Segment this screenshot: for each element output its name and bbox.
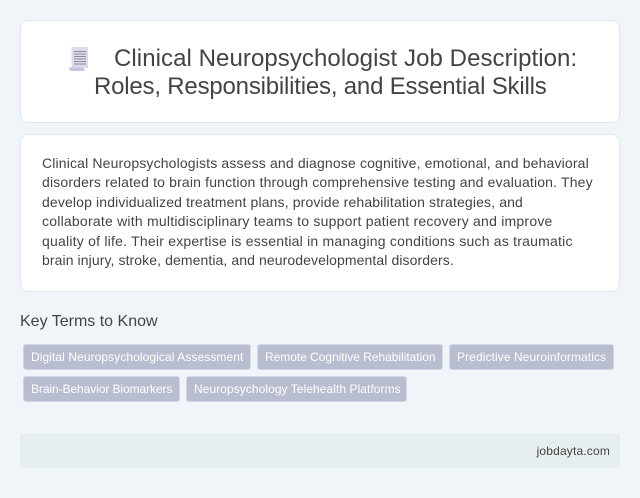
description text: disorders related to brain function through comprehensive testing and evaluation. They — [42, 174, 593, 190]
heading: key terms: Key Terms to Know — [20, 313, 158, 330]
description text: brain injury, stroke, dementia, and neurodevelopmental disorders. — [42, 252, 454, 268]
tag: biomarkers — [23, 376, 180, 402]
description text: develop individualized treatment plans, provide rehabilitation strategies, and — [42, 194, 523, 210]
description text: quality of life. Their expertise is essential in managing conditions such as traumatic — [42, 233, 573, 249]
tag: remote rehabilitation — [257, 344, 443, 370]
description text: Clinical Neuropsychologists assess and diagnose cognitive, emotional, and behavioral — [42, 155, 589, 171]
tag: digital assessment — [23, 344, 251, 370]
footer bar — [20, 434, 620, 468]
tag: telehealth platforms — [186, 376, 407, 402]
title — [94, 45, 577, 100]
icon: document scroll — [69, 47, 88, 71]
tag group: key terms — [23, 344, 614, 402]
footer source: jobdayta.com — [537, 444, 610, 458]
description text — [42, 155, 593, 268]
title: Clinical Neuropsychologist Job Description: — [114, 45, 577, 72]
tag: biomarkers: Brain-Behavior Biomarkers — [31, 382, 172, 396]
tag: remote rehabilitation: Remote Cognitive Rehabilitation — [265, 350, 436, 364]
title: Roles, Responsibilities, and Essential Skills — [94, 73, 547, 100]
description text: collaborate with multidisciplinary teams to support patient recovery and improve — [42, 213, 553, 229]
tag: digital assessment: Digital Neuropsychological Assessment — [31, 350, 243, 364]
tag: predictive neuroinformatics — [449, 344, 614, 370]
panel: description — [20, 134, 620, 292]
tag: telehealth platforms: Neuropsychology Telehealth Platforms — [194, 382, 401, 396]
tag: predictive neuroinformatics: Predictive Neuroinformatics — [457, 350, 606, 364]
panel: title card — [20, 20, 620, 123]
